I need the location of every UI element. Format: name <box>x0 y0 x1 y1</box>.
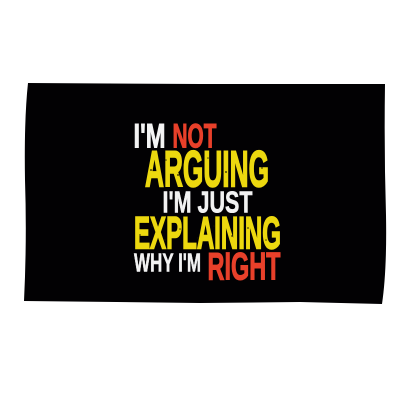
line: ARGUING: ARGUING <box>145 140 269 198</box>
line: WHY I'M: WHY I'M <box>134 250 201 278</box>
line: I'M JUST: I'M JUST <box>162 184 253 220</box>
distress speckles <box>139 157 267 241</box>
towel background <box>24 83 386 304</box>
line: NOT: NOT <box>172 118 217 156</box>
slogan text <box>134 118 281 288</box>
line: I'M: I'M <box>134 118 166 156</box>
line: RIGHT: RIGHT <box>208 246 281 288</box>
